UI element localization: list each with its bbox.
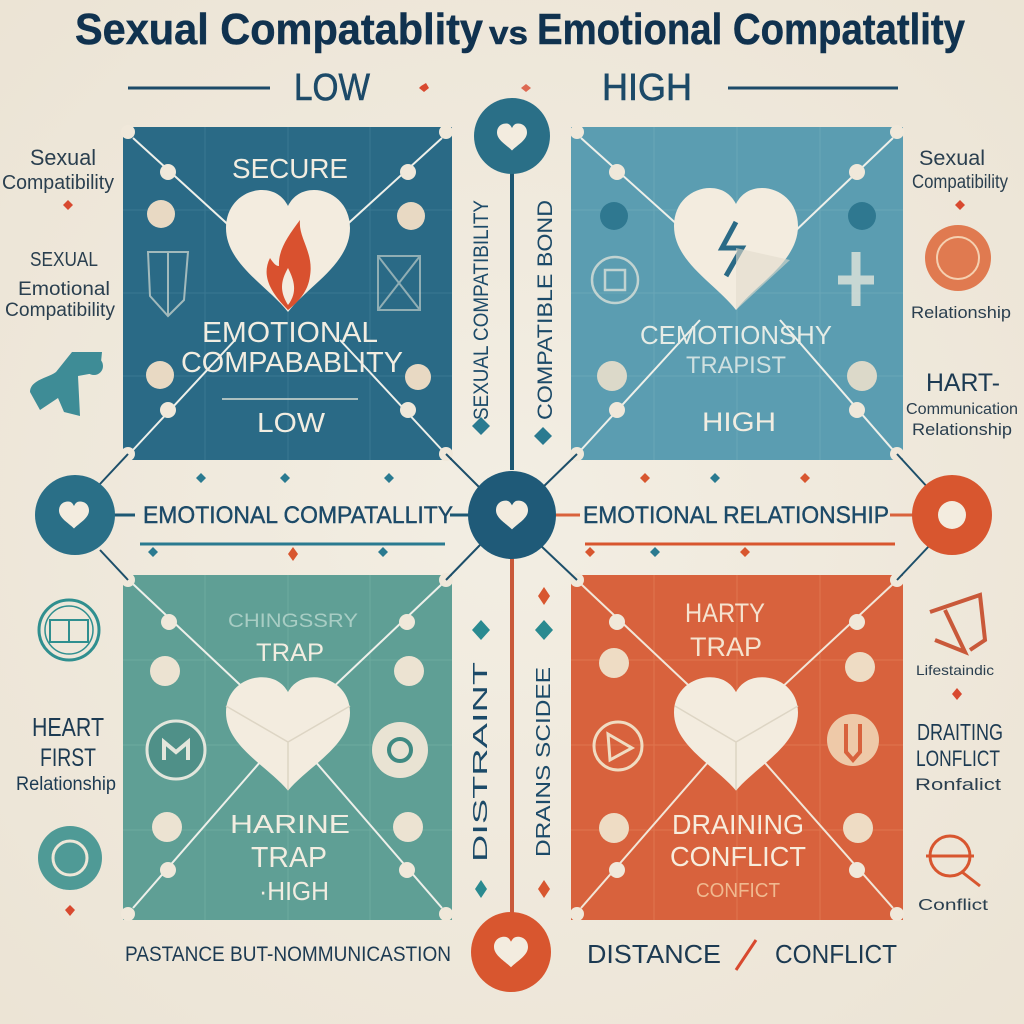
panel: bottom-right draining conflict: DRAINING xyxy=(672,809,804,840)
heart xyxy=(674,677,798,791)
horizontal band: left xyxy=(140,473,453,561)
diagonal connectors to hub circles xyxy=(100,454,930,580)
heart with glyph xyxy=(674,188,798,310)
title: Sexual Compatablity xyxy=(75,5,483,54)
icon: orange circle xyxy=(925,225,991,291)
icon: conflict magnifier xyxy=(926,836,980,886)
panel text: CHINGSSRY xyxy=(228,611,358,632)
label: conflict: Conflict xyxy=(918,897,989,914)
panel: bottom-left harmine trap: HARINE xyxy=(230,809,350,839)
right lower labels: Ronfalict xyxy=(915,775,1001,794)
icon: right medallion xyxy=(827,714,879,766)
panel: top-left secure: EMOTIONAL xyxy=(202,317,378,349)
panel: bottom-left harmine trap: ·HIGH xyxy=(259,876,329,906)
icon: ring badge xyxy=(38,826,102,916)
hub: center xyxy=(468,471,556,559)
title: Emotional Compatatlity xyxy=(537,5,965,54)
right text block: Communication xyxy=(906,401,1018,418)
right lower labels: DRAITING xyxy=(917,719,1003,745)
axis header: low and high xyxy=(128,67,898,109)
vertical axis labels top: COMPATIBLE BOND xyxy=(534,200,557,420)
icon: left medallion xyxy=(594,722,642,770)
hub: right xyxy=(912,475,992,555)
icon: right cross xyxy=(378,256,420,310)
vertical axis labels bottom: DISTRAINT xyxy=(470,662,492,862)
right text block: HART- xyxy=(926,369,1000,397)
right column: top labels xyxy=(912,147,1008,210)
panel: bottom-right draining conflict xyxy=(570,573,904,921)
heart with flame xyxy=(226,190,350,312)
left column: top labels: Compatibility xyxy=(2,172,114,194)
right lower labels: LONFLICT xyxy=(916,746,1000,771)
right text block: Relationship xyxy=(911,303,1011,322)
axis header: low and high: HIGH xyxy=(602,67,692,109)
axis header: low and high: LOW xyxy=(294,67,370,109)
icon: right cross xyxy=(838,252,874,306)
vertical axis labels top: SEXUAL COMPATIBILITY xyxy=(470,200,493,420)
right lower labels: Lifestaindic xyxy=(916,662,994,678)
right column: top labels: Sexual xyxy=(919,147,985,170)
icon: left teal figure xyxy=(30,352,103,416)
panel: top-right emotional trap: TRAPIST xyxy=(686,352,786,379)
panel: bottom-right draining conflict: TRAP xyxy=(690,632,762,662)
icon: red knot xyxy=(930,595,985,652)
horizontal band: right: EMOTIONAL RELATIONSHIP xyxy=(583,502,889,529)
panel text: CEMOTIONSHY xyxy=(640,320,832,350)
panel text: HARTY xyxy=(685,598,765,628)
left column: top labels: Emotional xyxy=(18,279,110,300)
left text block: HEART xyxy=(32,712,104,742)
icon: left shield xyxy=(148,252,188,316)
panel: bottom-left harmine trap: TRAP xyxy=(256,639,324,667)
vertical axis labels bottom xyxy=(470,587,555,898)
panel: top-left secure xyxy=(121,125,453,461)
panel: bottom-left harmine trap xyxy=(121,573,453,921)
left column: top labels: SEXUAL xyxy=(30,249,98,271)
heart xyxy=(226,677,350,791)
title xyxy=(75,5,965,54)
icon: right medallion xyxy=(372,722,428,778)
bottom label right: DISTANCE xyxy=(587,939,721,969)
vertical axis labels bottom: DRAINS SCIDEE xyxy=(533,667,555,857)
hub: top xyxy=(474,98,550,174)
vertical axis labels top xyxy=(470,200,557,445)
right text block xyxy=(906,303,1018,439)
panel: top-left secure: LOW xyxy=(257,407,326,438)
right lower labels xyxy=(915,662,1003,794)
left text block xyxy=(16,712,116,795)
left column: top labels: Compatibility xyxy=(5,300,115,321)
icon: left circle xyxy=(592,257,638,303)
center axes xyxy=(110,170,915,920)
bottom labels: PASTANCE BUT-NOMMUNICASTION xyxy=(125,943,451,966)
panel: bottom-right draining conflict: CONFICT xyxy=(696,880,780,902)
horizontal band: right xyxy=(583,473,895,557)
title: vs xyxy=(489,15,528,51)
panel: top-left secure: COMPABABLITY xyxy=(181,347,403,379)
bottom label right: CONFLICT xyxy=(775,939,897,969)
hub: left xyxy=(35,475,115,555)
panel text: SECURE xyxy=(232,153,348,184)
hub: bottom xyxy=(471,912,551,992)
bottom label right xyxy=(587,939,897,970)
right text block: Relationship xyxy=(912,420,1012,439)
left column: top labels: Sexual xyxy=(30,145,96,170)
right column: top labels: Compatibility xyxy=(912,172,1008,193)
horizontal band: left: EMOTIONAL COMPATALLITY xyxy=(143,502,453,529)
icon: globe badge xyxy=(39,600,99,660)
panel: top-right emotional trap: HIGH xyxy=(702,407,776,437)
panel: bottom-right draining conflict: CONFLICT xyxy=(670,841,806,872)
left text block: FIRST xyxy=(40,744,96,772)
panel: bottom-left harmine trap: TRAP xyxy=(251,842,327,874)
panel: top-right emotional trap xyxy=(570,125,904,461)
icon: left medallion xyxy=(147,721,205,779)
left column: top labels xyxy=(2,145,115,321)
left text block: Relationship xyxy=(16,774,116,795)
